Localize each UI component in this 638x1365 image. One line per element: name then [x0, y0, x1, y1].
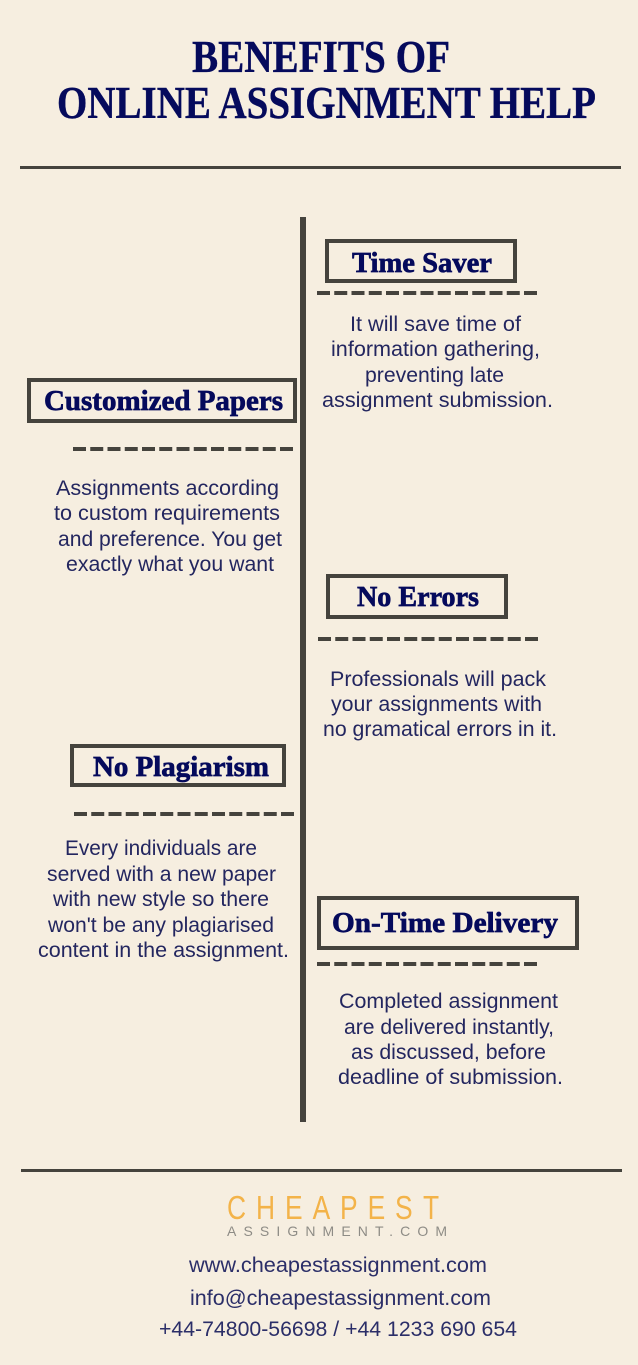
text: no errors: no gramatical errors in it. — [323, 718, 557, 741]
text: no errors: your assignments with — [331, 693, 542, 716]
panel: no plagiarism — [38, 746, 294, 962]
contact details — [159, 1253, 517, 1341]
text: customized papers: and preference. You get — [58, 528, 282, 551]
text: on-time delivery: are delivered instantly, — [344, 1016, 554, 1039]
text: customized papers — [54, 477, 282, 576]
text: time saver: assignment submission. — [322, 389, 553, 412]
heading: time saver — [327, 241, 515, 281]
text: on-time delivery: deadline of submission. — [338, 1066, 563, 1089]
heading: customized papers: Customized Papers — [44, 385, 283, 417]
central timeline — [300, 217, 306, 1122]
contact details: info@cheapestassignment.com — [190, 1286, 491, 1310]
text: time saver: It will save time of — [350, 313, 521, 336]
logo: CHEAPEST — [227, 1190, 439, 1227]
heading: no plagiarism: No Plagiarism — [93, 751, 269, 783]
text: customized papers: exactly what you want — [66, 553, 274, 576]
text: no errors — [323, 668, 557, 741]
text: on-time delivery — [338, 990, 563, 1089]
panel: no errors — [318, 576, 557, 741]
logo: ASSIGNMENT.COM — [227, 1223, 447, 1239]
heading: on-time delivery — [319, 898, 577, 948]
text: no plagiarism — [38, 837, 289, 962]
title — [57, 32, 596, 128]
text: time saver: information gathering, — [331, 338, 540, 361]
text: on-time delivery: as discussed, before — [351, 1041, 546, 1064]
text: time saver: preventing late — [365, 364, 504, 387]
title: BENEFITS OF — [192, 32, 450, 82]
text: on-time delivery: Completed assignment — [339, 990, 558, 1013]
text: time saver — [322, 313, 553, 412]
panel: customized papers — [29, 380, 295, 576]
contact details: www.cheapestassignment.com — [188, 1253, 487, 1277]
text: no plagiarism: won't be any plagiarised — [47, 914, 274, 937]
heading: no plagiarism — [72, 746, 284, 785]
heading: no errors: No Errors — [357, 581, 479, 613]
panel: time saver — [317, 241, 553, 412]
text: no plagiarism: content in the assignment. — [38, 939, 289, 962]
text: customized papers: to custom requirements — [54, 502, 280, 525]
heading: time saver: Time Saver — [352, 247, 492, 279]
text: no plagiarism: Every individuals are — [65, 837, 257, 860]
text: no plagiarism: with new style so there — [52, 888, 269, 911]
text: customized papers: Assignments according — [56, 477, 279, 500]
text: no errors: Professionals will pack — [330, 668, 546, 691]
heading: no errors — [328, 576, 506, 617]
panel: on-time delivery — [317, 898, 577, 1089]
heading: on-time delivery: On-Time Delivery — [332, 907, 559, 939]
contact details: +44-74800-56698 / +44 1233 690 654 — [159, 1317, 517, 1341]
text: no plagiarism: served with a new paper — [47, 863, 276, 886]
